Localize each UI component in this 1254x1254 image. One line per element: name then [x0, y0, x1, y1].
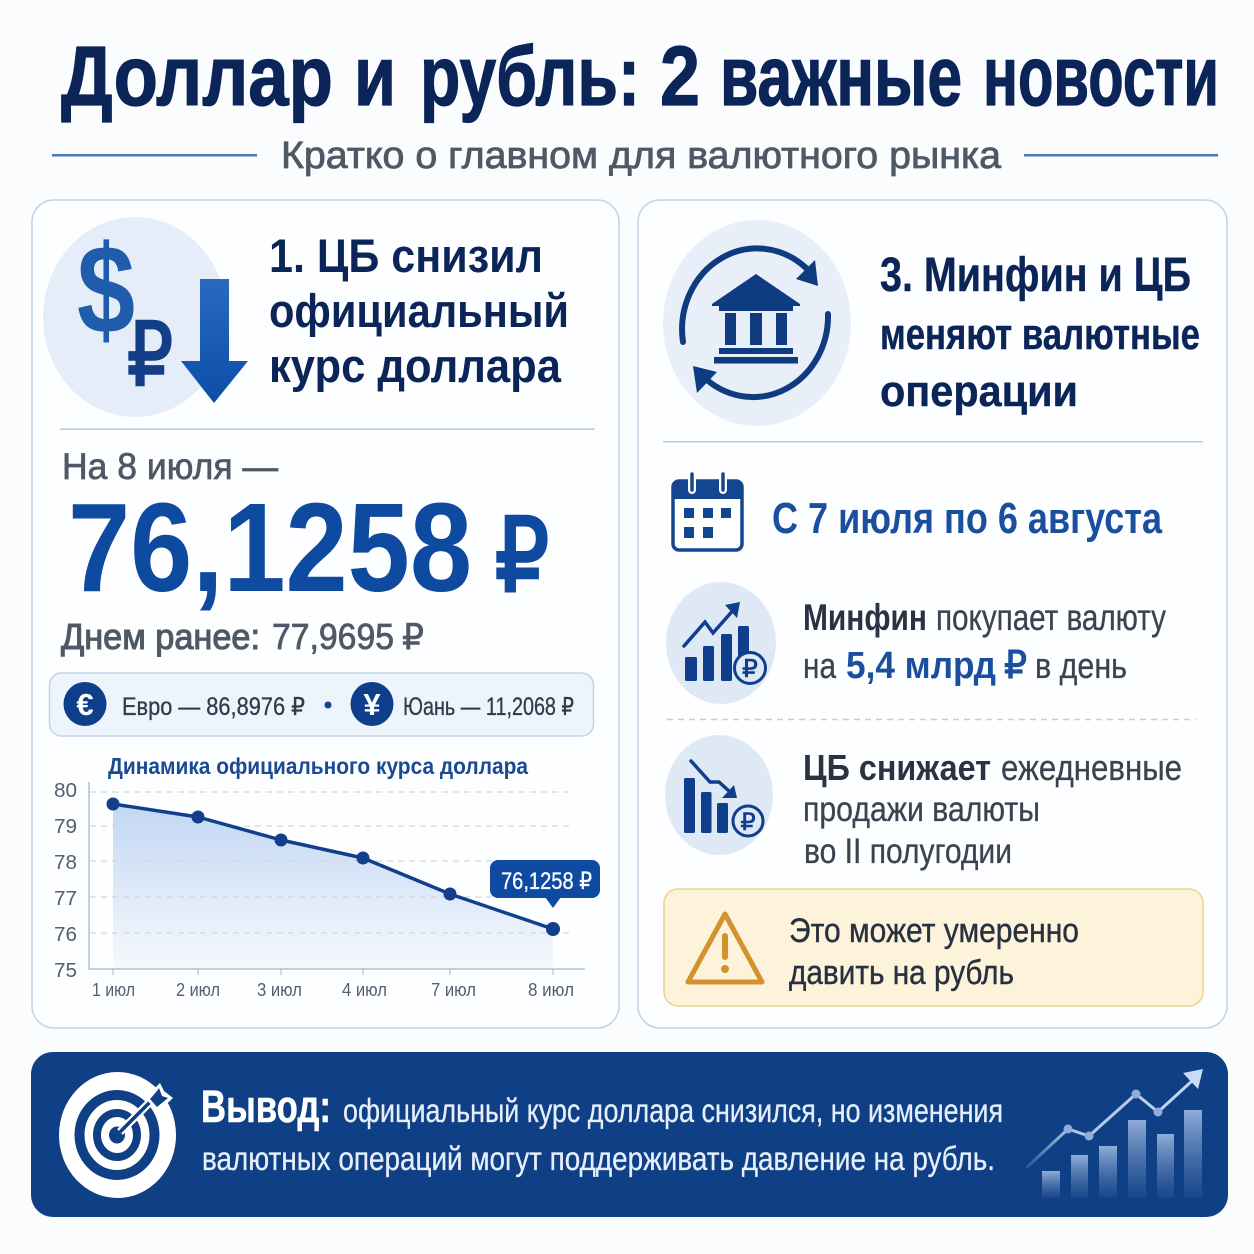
chart title: Динамика официального курса доллара	[108, 753, 528, 779]
panel: conclusion banner	[31, 1052, 1228, 1217]
previous rate: Днем ранее:	[61, 616, 260, 657]
subtitle: Кратко о главном для валютного рынка	[281, 135, 1002, 177]
title: Доллар	[61, 29, 333, 123]
previous rate	[61, 616, 424, 657]
heading: operations	[880, 249, 1200, 416]
yuan rate: Юань — 11,2068 ₽	[403, 693, 574, 721]
text: Minfin: 5,4 млрд	[846, 645, 996, 687]
text: central bank: во II полугодии	[804, 832, 1012, 871]
text: central bank	[803, 747, 1182, 871]
heading: rate: официальный	[269, 284, 569, 337]
x axis labels: 1 июл	[92, 980, 135, 1000]
title: рубль:	[420, 29, 640, 123]
x axis labels: 3 июл	[257, 980, 302, 1000]
panel: official rate	[32, 200, 619, 1028]
conclusion text	[201, 1081, 1003, 1177]
icon: warning triangle	[688, 914, 762, 982]
previous rate: ₽	[402, 616, 424, 657]
icon: falling bars with ruble: ₽	[740, 809, 756, 836]
text: central bank: продажи валюты	[803, 790, 1040, 829]
y axis labels	[54, 780, 77, 982]
y axis labels: 78	[54, 852, 77, 874]
text: Minfin	[803, 597, 1166, 687]
icon: growth chart	[1026, 1069, 1203, 1198]
text: Minfin: Минфин	[803, 597, 927, 638]
icon: dollar and ruble falling	[43, 217, 248, 417]
text: Minfin: в день	[1035, 645, 1127, 686]
icon: growing bars with ruble	[666, 582, 776, 704]
heading: rate	[269, 229, 569, 392]
heading: rate: 1. ЦБ снизил	[269, 229, 543, 282]
icon: target	[59, 1072, 176, 1198]
x axis labels: 2 июл	[176, 980, 220, 1000]
icon: dollar and ruble falling: ₽	[127, 307, 173, 404]
warning text	[789, 912, 1079, 992]
date label: На 8 июля —	[62, 446, 278, 487]
y axis labels: 75	[54, 960, 77, 982]
period: С 7 июля по 6 августа	[772, 494, 1162, 543]
warning text: давить на рубль	[789, 954, 1014, 992]
x axis labels: 4 июл	[342, 980, 387, 1000]
conclusion text: Вывод:	[201, 1081, 331, 1132]
icon: dollar and ruble falling: $	[77, 219, 135, 360]
text: Minfin: покупает валюту	[936, 597, 1166, 638]
y axis labels: 77	[54, 888, 77, 910]
heading: rate: курс доллара	[269, 339, 562, 392]
y axis labels: 76	[54, 924, 77, 946]
conclusion text: валютных операций могут поддерживать давление на рубль.	[202, 1140, 995, 1177]
x axis labels: 7 июл	[431, 980, 476, 1000]
icon: yuan	[350, 682, 394, 726]
conclusion text: официальный курс доллара снизился, но изменения	[343, 1092, 1003, 1129]
x axis labels: 8 июл	[528, 980, 574, 1000]
value tag: 76,1258 ₽	[501, 868, 592, 895]
data line	[106, 798, 560, 936]
other currencies pill	[50, 673, 594, 736]
icon: euro	[64, 682, 106, 726]
title	[61, 29, 1219, 123]
heading: operations: 3. Минфин и ЦБ	[880, 249, 1191, 302]
title: и	[354, 29, 396, 123]
title: 2	[660, 29, 700, 123]
icon: bank with cycle arrows	[663, 220, 851, 426]
y axis labels: 79	[54, 816, 77, 838]
y axis labels: 80	[54, 780, 77, 802]
value tag	[490, 860, 600, 908]
title: важные	[720, 29, 962, 123]
line chart: dollar rate	[54, 753, 600, 1000]
big rate value: 76,1258	[68, 477, 472, 618]
x axis labels	[92, 980, 574, 1000]
text: central bank: ЦБ снижает	[803, 747, 991, 788]
warning text: Это может умеренно	[789, 912, 1079, 950]
big rate value: ₽	[495, 499, 549, 613]
icon: calendar	[673, 474, 742, 550]
panel: currency operations	[638, 200, 1227, 1028]
previous rate: 77,9695	[272, 616, 394, 657]
icon: yuan: ¥	[363, 687, 381, 722]
text: Minfin: ₽	[1004, 645, 1027, 687]
euro rate: Евро — 86,8976 ₽	[122, 693, 305, 721]
icon: euro: €	[76, 687, 94, 722]
text: Minfin: на	[803, 645, 837, 686]
callout: warning	[664, 889, 1203, 1006]
icon: falling bars with ruble	[665, 735, 773, 855]
icon: growing bars with ruble: ₽	[742, 655, 758, 683]
heading: operations: операции	[880, 367, 1078, 416]
text: central bank: ежедневные	[1001, 747, 1182, 788]
